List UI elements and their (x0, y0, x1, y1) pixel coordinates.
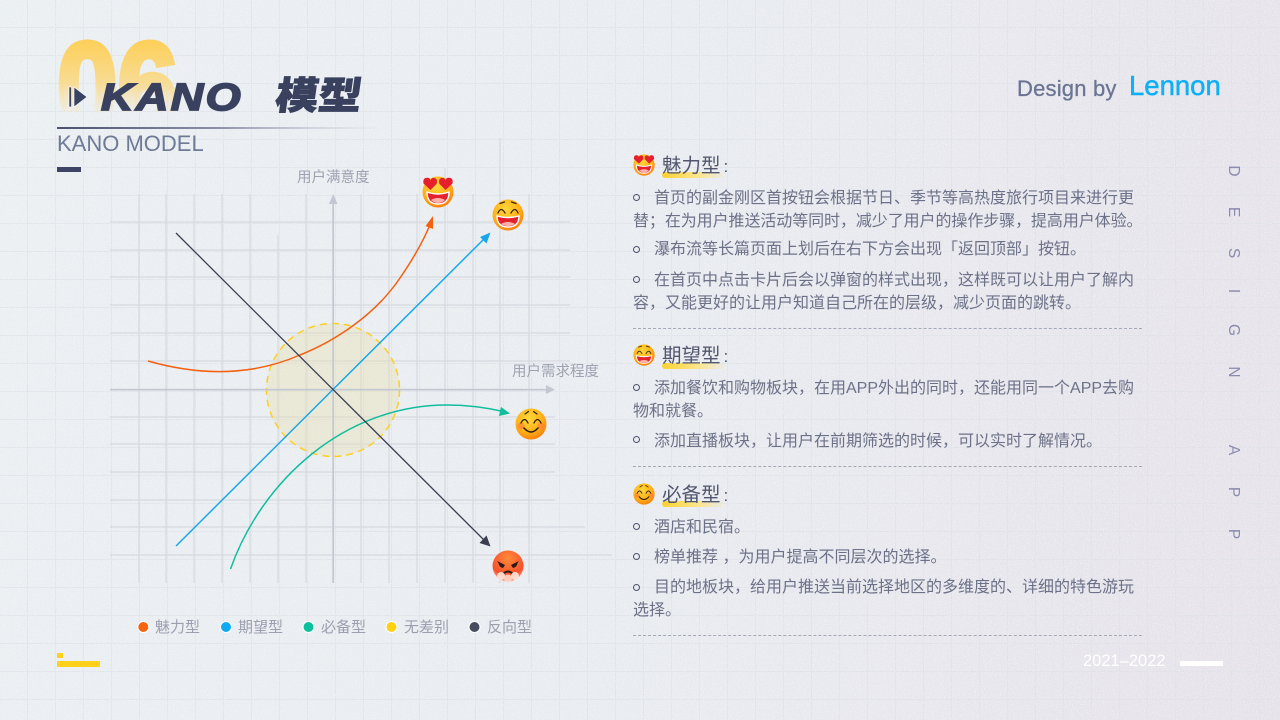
icon: angry emoji (492, 550, 524, 582)
bullet (633, 384, 640, 391)
vertical label: I (1225, 289, 1242, 293)
KANO chart (110, 138, 612, 583)
icon: heart eyes emoji (633, 154, 655, 176)
curve: attractive (148, 216, 433, 372)
icon: smiling emoji (633, 483, 655, 505)
y axis label: 用户满意度 (297, 168, 370, 186)
bullet (633, 246, 640, 253)
vertical label: P (1225, 529, 1242, 539)
text line: 在首页中点击卡片后会以弹窗的样式出现，这样既可以让用户了解内 (654, 272, 1134, 289)
icon: heart eyes emoji (422, 176, 454, 208)
subtitle: KANO MODEL (57, 131, 204, 156)
panel: performance (633, 344, 1142, 467)
text line: 选择。 (633, 602, 681, 619)
icon: laughing emoji (492, 200, 524, 230)
vertical label: G (1225, 324, 1242, 336)
bullet (633, 436, 640, 443)
vertical label: A (1225, 445, 1242, 455)
divider (633, 635, 1142, 636)
panel: attractive (633, 154, 1142, 329)
text line: 添加餐饮和购物板块，在用APP外出的同时，还能用同一个APP去购 (654, 380, 1134, 397)
legend: performance: 期望型 (238, 619, 283, 636)
vertical label: D (1225, 165, 1242, 177)
divider (633, 328, 1142, 329)
heading: 魅力型: (662, 155, 728, 177)
byline: Lennon (1129, 70, 1221, 101)
legend: must-be: 必备型 (321, 619, 366, 636)
text line: 酒店和民宿。 (654, 519, 750, 536)
text line: 容，又能更好的让用户知道自己所在的层级，减少页面的跳转。 (633, 295, 1081, 312)
bullet (633, 523, 640, 530)
text line: 添加直播板块，让用户在前期筛选的时候，可以实时了解情况。 (654, 433, 1102, 450)
legend: reverse: 反向型 (487, 619, 532, 636)
footer accent: white bar (1180, 661, 1223, 666)
text line: 瀑布流等长篇页面上划后在右下方会出现「返回顶部」按钮。 (654, 241, 1086, 258)
page header: section number and title (57, 40, 366, 172)
text line: 物和就餐。 (633, 403, 713, 420)
icon: smiling emoji (516, 408, 546, 440)
footer: years: 2021–2022 (1083, 652, 1166, 670)
divider (633, 466, 1142, 467)
heading underline (662, 172, 726, 178)
icon: laughing emoji (633, 344, 655, 366)
heading underline (662, 501, 726, 507)
bullet (633, 194, 640, 201)
curve: must-be (230, 405, 510, 569)
bullet (633, 553, 640, 560)
text line: 首页的副金刚区首按钮会根据节日、季节等高热度旅行项目来进行更 (654, 190, 1134, 207)
chart grid (110, 138, 612, 583)
title KANO: KANO (101, 77, 243, 119)
footer accent: yellow (57, 653, 100, 667)
legend: attractive: 魅力型 (155, 619, 200, 636)
byline (1017, 70, 1221, 101)
heading: 期望型: (662, 345, 728, 367)
chart legend (138, 619, 532, 636)
line: reverse (176, 233, 490, 546)
vertical label (1225, 165, 1242, 539)
bullet (633, 584, 640, 591)
section number 06: 06 (57, 20, 178, 158)
panel: must-be (633, 483, 1142, 636)
heading: 必备型: (662, 484, 728, 506)
title rule (57, 127, 385, 129)
vertical label: E (1225, 207, 1242, 217)
byline: Design by (1017, 76, 1117, 101)
vertical label: N (1225, 366, 1242, 378)
subtitle accent bar (57, 167, 81, 172)
x axis (110, 385, 555, 394)
text line: 榜单推荐 ，为用户提高不同层次的选择。 (654, 549, 946, 566)
legend: indifferent: 无差别 (404, 619, 449, 636)
line: performance (176, 232, 490, 546)
text line: 目的地板块，给用户推送当前选择地区的多维度的、详细的特色游玩 (654, 579, 1134, 596)
title 模型: 模型 (272, 65, 366, 120)
vertical label: S (1225, 248, 1242, 258)
y axis (329, 194, 338, 583)
bullet (633, 276, 640, 283)
text line: 替；在为用户推送活动等同时，减少了用户的操作步骤，提高用户体验。 (633, 213, 1142, 230)
icon: play marker (69, 87, 87, 107)
heading underline (662, 363, 726, 369)
zone: indifferent circle (266, 324, 400, 456)
x axis label: 用户需求程度 (512, 363, 599, 380)
vertical label: P (1225, 487, 1242, 497)
